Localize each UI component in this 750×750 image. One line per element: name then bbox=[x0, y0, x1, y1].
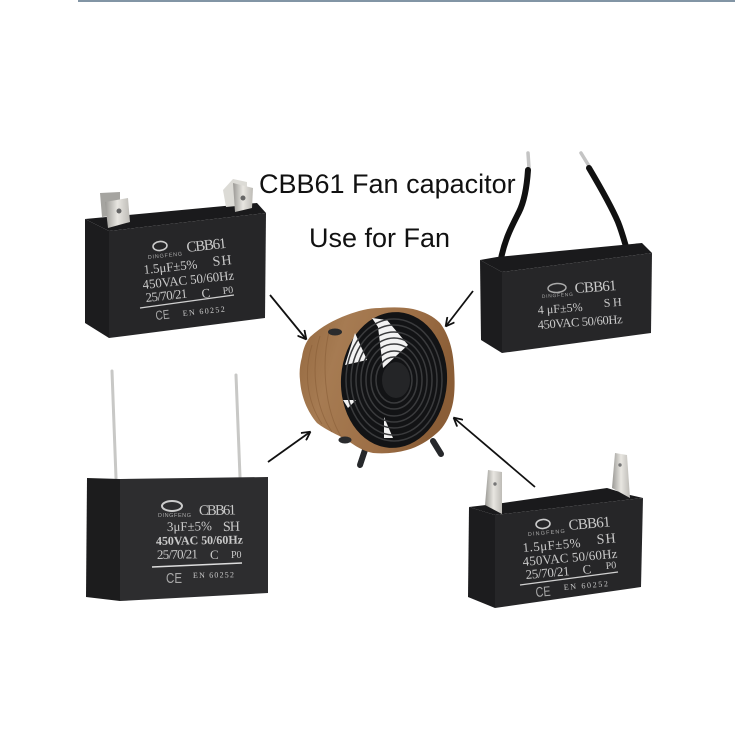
gaps between blades bbox=[343, 318, 408, 438]
wooden drum bbox=[300, 307, 455, 453]
print bbox=[520, 514, 618, 600]
print: SH bbox=[596, 531, 616, 548]
case bbox=[86, 477, 268, 601]
print: SH bbox=[603, 295, 622, 310]
print: DINGFENG bbox=[528, 529, 565, 538]
arrow: top left capacitor to fan bbox=[270, 295, 306, 339]
print bbox=[152, 501, 244, 587]
case bbox=[468, 488, 643, 608]
title: CBB61 Fan capacitor: CBB61 Fan capacitor bbox=[259, 169, 516, 199]
print: 25/70/21 bbox=[145, 286, 188, 305]
print: DINGFENG bbox=[148, 251, 183, 261]
case bbox=[480, 243, 652, 353]
print: P0 bbox=[222, 285, 234, 297]
print: CBB61 bbox=[574, 278, 617, 297]
print: CBB61 bbox=[568, 514, 611, 534]
mounting bolts bbox=[328, 328, 352, 444]
print: C bbox=[201, 285, 211, 301]
print: 1.5μF±5% bbox=[522, 535, 581, 555]
print: EN 60252 bbox=[193, 570, 234, 580]
wire leads bbox=[500, 153, 627, 264]
arrow: bottom right capacitor to fan bbox=[454, 418, 535, 487]
grille opening bbox=[336, 308, 452, 452]
print: C bbox=[210, 547, 219, 562]
print: DINGFENG bbox=[158, 513, 191, 519]
print: SH bbox=[212, 253, 232, 270]
print: 450VAC 50/60Hz bbox=[156, 532, 244, 548]
subtitle: Use for Fan: Use for Fan bbox=[309, 223, 450, 253]
print: 3μF±5% bbox=[167, 518, 212, 534]
print: EN 60252 bbox=[563, 579, 609, 592]
top rule bbox=[78, 0, 735, 2]
print: CE bbox=[155, 307, 170, 323]
print: 25/70/21 bbox=[525, 563, 570, 582]
capacitor: bottom right, 1.5uF with quick-connect tabs bbox=[468, 453, 643, 608]
print: P0 bbox=[605, 560, 617, 572]
print: CE bbox=[166, 570, 182, 587]
grille rings bbox=[346, 319, 442, 441]
wood grain bbox=[307, 328, 342, 438]
print: P0 bbox=[231, 550, 242, 561]
print: CE bbox=[535, 583, 551, 600]
case bbox=[85, 203, 266, 338]
capacitor: top right, 4uF with wire leads bbox=[480, 153, 652, 353]
print: 450VAC 50/60Hz bbox=[142, 267, 235, 292]
print: 1.5μF±5% bbox=[143, 256, 198, 277]
print bbox=[140, 236, 235, 323]
central fan illustration bbox=[300, 307, 455, 465]
capacitor: bottom left, 3uF with pin leads bbox=[86, 371, 268, 601]
arrow: top right capacitor to fan bbox=[446, 291, 473, 326]
print: DINGFENG bbox=[542, 292, 573, 300]
print bbox=[537, 278, 623, 332]
pin leads bbox=[112, 371, 240, 478]
print: CBB61 bbox=[199, 502, 236, 519]
print: EN 60252 bbox=[182, 305, 226, 318]
print: SH bbox=[223, 520, 240, 535]
print: CBB61 bbox=[186, 236, 227, 256]
print: C bbox=[582, 561, 592, 577]
print: 450VAC 50/60Hz bbox=[522, 546, 618, 569]
print: 4 μF±5% bbox=[537, 300, 583, 317]
capacitor: top left, 1.5uF with spade terminals bbox=[85, 179, 266, 338]
arrow: bottom left capacitor to fan bbox=[268, 432, 310, 462]
terminals bbox=[100, 179, 253, 228]
fan legs bbox=[360, 441, 441, 465]
hub bbox=[382, 362, 410, 398]
tabs bbox=[485, 453, 630, 514]
print: 25/70/21 bbox=[157, 546, 198, 562]
print: 450VAC 50/60Hz bbox=[537, 312, 623, 332]
